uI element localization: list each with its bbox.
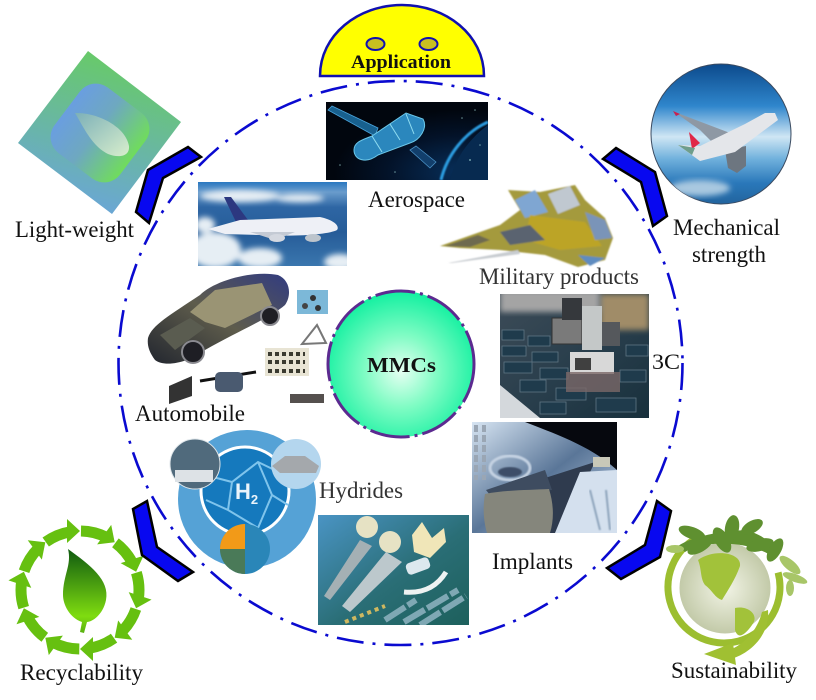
label: light-weight: Light-weight xyxy=(15,217,135,242)
label: mechanical strength: Mechanical xyxy=(673,215,780,240)
panel: implants xyxy=(472,422,617,574)
panel: aerospace xyxy=(326,102,488,212)
panel: 3C xyxy=(500,290,680,418)
icon: hydrogen cycle xyxy=(170,430,321,574)
panel: light-weight xyxy=(15,51,181,242)
panel: mechanical strength: strength xyxy=(692,242,766,267)
arrow: top-left chevron xyxy=(136,147,201,223)
label: automobile: Automobile xyxy=(135,401,245,426)
panel: mechanical strength xyxy=(651,64,791,267)
arrow: top-right chevron xyxy=(603,148,667,226)
image: airliner xyxy=(198,182,347,266)
label: implants: Implants xyxy=(492,549,573,574)
image: x-ray with implant sample xyxy=(472,422,617,533)
panel: hydrides xyxy=(170,430,403,574)
label: aerospace: Aerospace xyxy=(368,187,465,212)
image: automotive parts xyxy=(169,290,328,404)
arrow: bottom-right chevron xyxy=(607,501,671,579)
application heading: Application xyxy=(351,52,451,73)
icon: hydrogen cycle: H xyxy=(235,479,251,504)
panel: recyclability xyxy=(8,519,152,685)
dashed application circle xyxy=(118,81,682,645)
center circle: MMCs xyxy=(328,291,474,437)
arrow: bottom-left chevron xyxy=(133,501,193,581)
icon: plane in circle xyxy=(651,64,791,204)
label: sustainability: Sustainability xyxy=(671,658,797,683)
image: electronics cart on keyboard xyxy=(500,290,649,418)
icon: hydrogen cycle: 2 xyxy=(251,492,258,507)
panel: automobile xyxy=(135,274,328,426)
center circle: MMCs: MMCs xyxy=(367,353,436,377)
panel: sustainability xyxy=(655,514,809,683)
image: car cutaway xyxy=(148,274,289,364)
icon: globe with leaves xyxy=(655,514,809,665)
icon: leaf tile xyxy=(18,51,181,214)
label: recyclability: Recyclability xyxy=(20,660,143,685)
icon: ring of arrows with leaf xyxy=(8,519,152,661)
label: 3C: 3C xyxy=(652,349,680,374)
image: fighter jet cutaway xyxy=(440,185,613,267)
application heading xyxy=(320,5,484,76)
label: hydrides: Hydrides xyxy=(319,478,403,503)
image: hip implants xyxy=(318,515,469,625)
label: military products: Military products xyxy=(479,264,639,289)
image: satellite over earth xyxy=(326,102,488,180)
panel: military products xyxy=(440,185,639,289)
